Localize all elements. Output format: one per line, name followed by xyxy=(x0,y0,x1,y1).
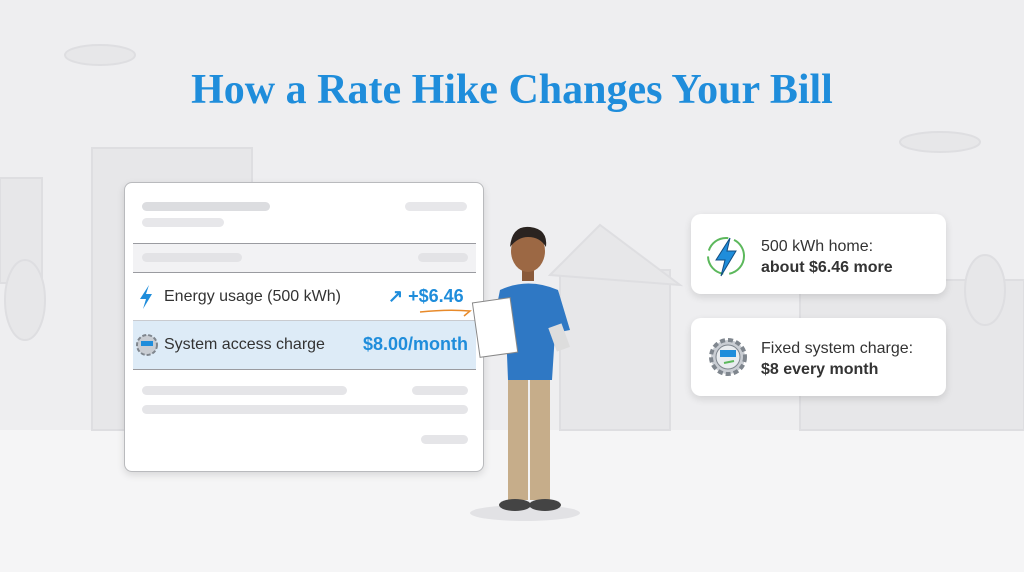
person xyxy=(470,226,580,521)
icon: gear xyxy=(709,338,747,376)
row: system access charge: $8.00/month xyxy=(363,334,468,354)
callout: 500 kWh home: about $6.46 more xyxy=(761,259,893,276)
icon: lightning xyxy=(707,237,745,276)
panel: bill xyxy=(124,182,484,472)
row: energy usage: ↗ +$6.46 xyxy=(388,286,464,306)
callout: 500 kWh home xyxy=(691,214,946,294)
callout: fixed system charge: Fixed system charge: xyxy=(761,340,913,357)
callout: fixed system charge: $8 every month xyxy=(761,361,878,378)
row: system access charge: System access charge xyxy=(164,336,325,353)
row: system access charge xyxy=(133,320,476,370)
row: energy usage xyxy=(140,285,472,317)
title: How a Rate Hike Changes Your Bill xyxy=(191,67,833,113)
callout: fixed system charge xyxy=(691,318,946,396)
row: energy usage: Energy usage (500 kWh) xyxy=(164,288,341,305)
callout: 500 kWh home: 500 kWh home: xyxy=(761,238,873,255)
